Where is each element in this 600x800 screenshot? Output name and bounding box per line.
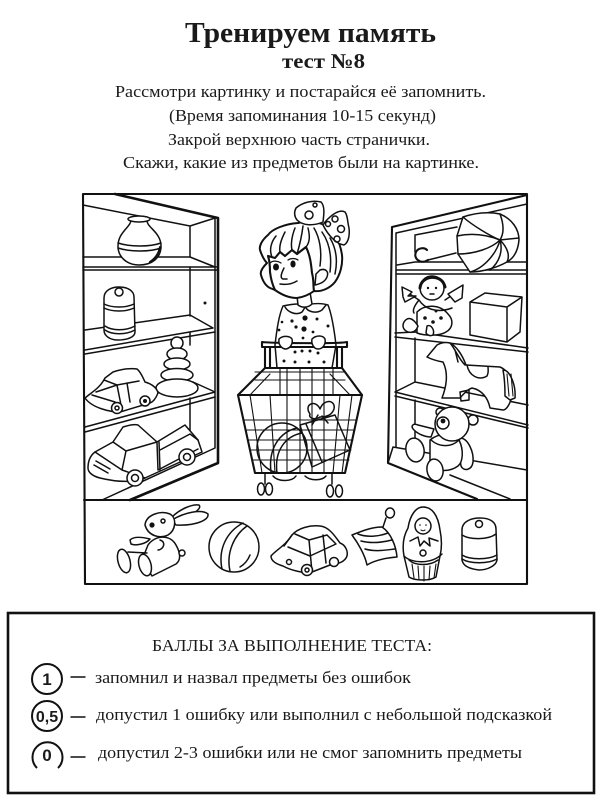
icon: ball — [209, 522, 259, 572]
bow — [295, 201, 349, 245]
icon: umbrella — [415, 213, 519, 272]
neck — [297, 292, 312, 307]
score row: 0.5 point — [32, 701, 552, 731]
score row: 0 points: допустил 2-3 ошибки или не смог запомнить предметы — [98, 743, 523, 762]
icon: stacking pyramid — [156, 337, 198, 397]
icon: spinning top — [352, 508, 397, 565]
instructions text block — [115, 82, 486, 172]
icon: cube — [470, 293, 522, 342]
icon: toy car on shelf — [85, 369, 158, 414]
gift in cart — [300, 401, 350, 467]
panel: scoring box — [8, 613, 594, 793]
panel: items row — [115, 505, 497, 581]
icon: toy car — [271, 526, 347, 576]
hands on handle — [279, 336, 325, 349]
title: Тренируем память — [185, 18, 436, 49]
instructions text block: (Время запоминания 10-15 секунд) — [169, 106, 436, 125]
score row: 1 point: 1 — [42, 670, 52, 689]
instructions text block: Рассмотри картинку и постарайся её запомнить. — [115, 82, 486, 101]
icon: rag doll — [402, 276, 463, 336]
icon: matryoshka doll — [403, 507, 442, 581]
icon: vase — [118, 216, 161, 265]
panel: left shelf unit — [83, 194, 218, 500]
ball in cart — [257, 423, 307, 473]
icon: bunny — [115, 505, 208, 577]
cart wheels and shoes — [258, 473, 342, 497]
icon: toy horse — [427, 342, 515, 410]
subtitle: test number: тест №8 — [282, 49, 365, 73]
scoring heading: БАЛЛЫ ЗА ВЫПОЛНЕНИЕ ТЕСТА: — [152, 636, 432, 655]
icon: jar — [104, 287, 135, 340]
instructions text block: Закрой верхнюю часть странички. — [168, 130, 430, 149]
icon: jar small — [462, 518, 497, 570]
head — [260, 222, 342, 298]
score row: 0.5 point: допустил 1 ошибку или выполнил с небольшой подсказкой — [96, 705, 552, 724]
score row: 0 points: 0 — [42, 746, 52, 765]
dress — [275, 304, 336, 368]
shopping cart with ball and gift — [238, 336, 362, 497]
score row: 1 point — [32, 664, 412, 694]
icon: teddy bear — [404, 407, 478, 482]
score row: 0.5 point: 0,5 — [36, 709, 58, 726]
girl figure — [260, 201, 349, 368]
icon: toy truck — [88, 425, 202, 486]
score row: 0 points — [33, 742, 523, 768]
instructions text block: Скажи, какие из предметов были на картинке. — [123, 153, 479, 172]
score row: 1 point: запомнил и назвал предметы без ошибок — [95, 668, 412, 687]
picture frame — [83, 194, 527, 584]
panel: right shelf unit — [388, 195, 528, 584]
